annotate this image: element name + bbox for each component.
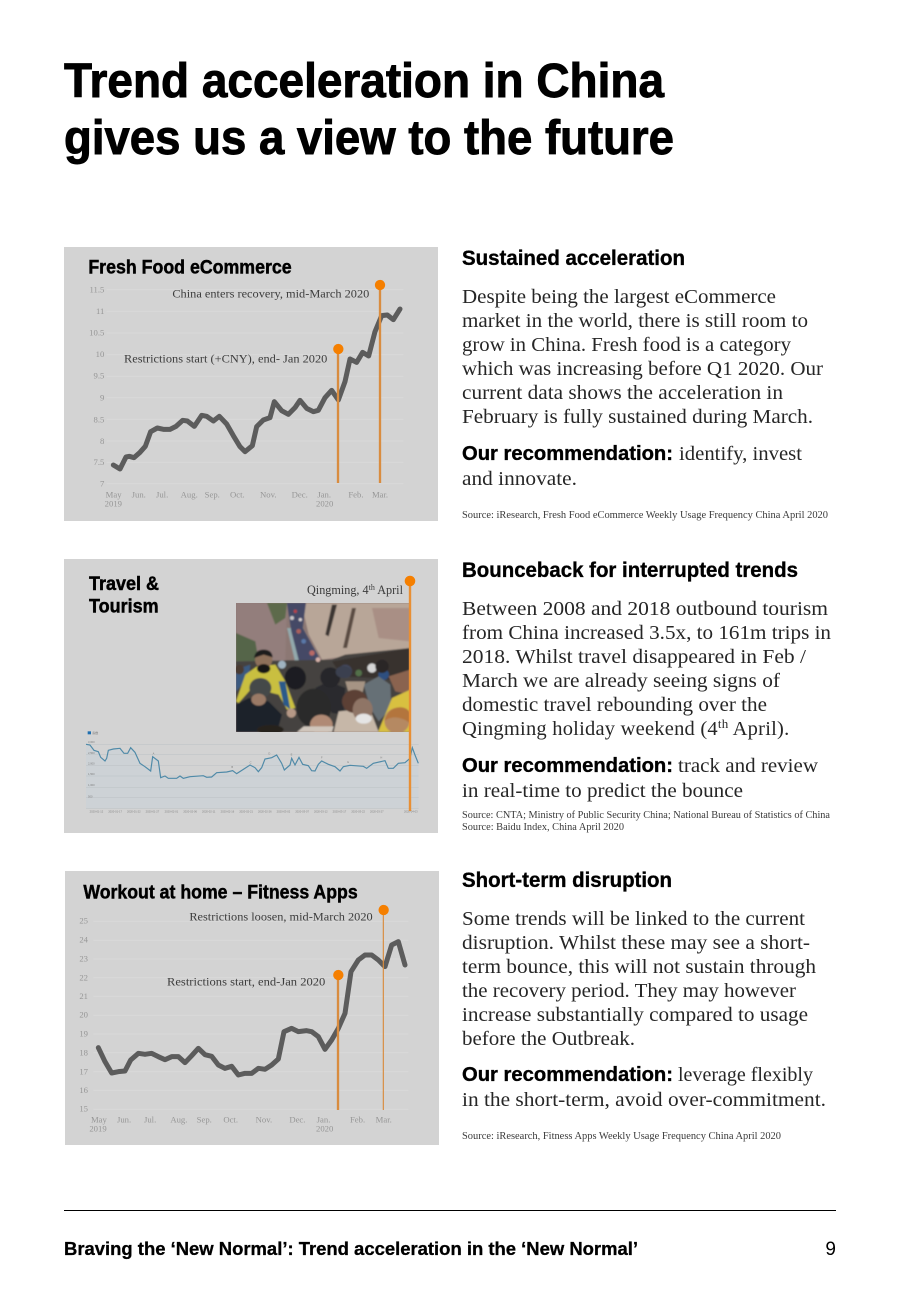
date labels: 2020-03-22: [351, 809, 365, 813]
y axis labels: 25: [79, 916, 88, 926]
legend: [88, 730, 98, 735]
text block: bounceback: th: [718, 716, 729, 731]
source: Source: Baidu Index, China April 2020: [462, 822, 624, 833]
x axis labels: Dec.: [292, 489, 308, 499]
recommendation: identify, invest: [679, 443, 802, 465]
annotation: Qingming: th: [369, 583, 375, 592]
date labels: 2020-01-17: [108, 809, 122, 813]
y axis labels: 7: [100, 479, 105, 489]
peak labels: A: [153, 752, 155, 756]
title: gives us a view to the future: [64, 112, 674, 165]
date labels: 2020-02-01: [165, 809, 179, 813]
source: Source: iResearch, Fitness Apps Weekly Usage Frequency China April 2020: [462, 1131, 781, 1142]
photo: crowd on mountain: [235, 603, 410, 735]
recommendation: Our recommendation:: [462, 443, 673, 465]
date labels: 2020-02-11: [202, 809, 216, 813]
panel: Workout at home chart: [65, 871, 439, 1145]
date labels: 2020-01-22: [127, 809, 141, 813]
panel: Fresh Food eCommerce chart: [64, 247, 438, 521]
y axis labels: 2,000: [88, 762, 95, 766]
x axis labels: Jul.: [144, 1115, 156, 1125]
recommendation: track and review: [678, 755, 818, 777]
peak labels: H: [380, 756, 382, 760]
text block: short-term disruption: before the Outbreak.: [462, 1028, 635, 1050]
source: Source: CNTA; Ministry of Public Security China; National Bureau of Statistics of China: [462, 810, 831, 821]
marker: Qingming: [405, 576, 415, 811]
x axis labels: Mar.: [372, 489, 388, 499]
x axis labels: May: [91, 1115, 108, 1125]
text block: sustained acceleration: grow in China. Fresh food is a category: [462, 334, 792, 356]
peak labels: E: [291, 753, 293, 757]
y axis labels: 1,000: [88, 783, 95, 787]
y axis labels: 15: [79, 1104, 88, 1114]
title: Trend acceleration in China: [64, 55, 664, 108]
annotation: Qingming: Qingming, 4: [307, 583, 369, 597]
y axis labels: 17: [79, 1066, 89, 1076]
text block: short-term disruption: increase substantially compared to usage: [462, 1004, 808, 1026]
y axis labels: 9.5: [94, 371, 104, 381]
text block: bounceback: March we are already seeing signs of: [462, 670, 780, 692]
text block: short-term disruption: the recovery period. They may however: [462, 980, 796, 1002]
date labels: 2020-01-12: [90, 809, 104, 813]
y axis labels: 1,500: [88, 772, 95, 776]
y axis labels: 11.5: [90, 284, 104, 294]
x axis labels: Jan.: [317, 1115, 330, 1125]
recommendation: [462, 755, 818, 802]
panel: Travel and Tourism chart: [64, 559, 438, 833]
x axis labels: 2020: [316, 1124, 333, 1134]
recommendation: in real-time to predict the bounce: [462, 780, 743, 802]
y axis labels: 19: [79, 1029, 88, 1039]
y axis labels: 500: [88, 794, 93, 798]
annotation: restrictions: Restrictions start (+CNY), end- Jan 2020: [124, 353, 328, 366]
chart heading: Travel &: [89, 574, 159, 595]
x axis labels: Oct.: [223, 1115, 238, 1125]
x axis labels: 2020: [316, 499, 333, 509]
y axis labels: 10: [96, 349, 104, 359]
text block: bounceback: domestic travel rebounding over the: [462, 694, 767, 716]
y axis labels: 18: [79, 1047, 88, 1057]
marker: restrictions loosen: [378, 905, 389, 1110]
text block: short-term disruption: [462, 869, 826, 1142]
recommendation: and innovate.: [462, 468, 577, 490]
x axis labels: 2019: [105, 499, 122, 509]
text block: short-term disruption: disruption. Whilst these may see a short-: [462, 932, 810, 954]
recommendation: [462, 1064, 826, 1111]
peak labels: G: [347, 760, 349, 764]
date labels: 2020-01-27: [146, 809, 160, 813]
marker: restrictions start: [333, 344, 343, 483]
peak labels: F: [321, 756, 323, 760]
peak labels: [153, 752, 382, 769]
x axis labels: Jan.: [317, 489, 331, 499]
recommendation: in the short-term, avoid over-commitment.: [462, 1089, 826, 1111]
y axis labels: 16: [79, 1085, 89, 1095]
x axis labels: Feb.: [350, 1115, 365, 1125]
text block: short-term disruption: Short-term disruption: [462, 869, 672, 892]
text block: bounceback: Bounceback for interrupted trends: [462, 559, 798, 582]
x axis labels: Mar.: [376, 1115, 392, 1125]
text block: sustained acceleration: February is fully sustained during March.: [462, 406, 813, 428]
y axis labels: 8: [100, 436, 104, 446]
x axis labels: Sep.: [197, 1115, 212, 1125]
x axis labels: [105, 489, 388, 509]
date labels: 2020-02-16: [221, 809, 235, 813]
footer text: Braving the ‘New Normal’: Trend acceleration in the ‘New Normal’: [64, 1239, 638, 1259]
line series: [113, 309, 400, 469]
x axis labels: Dec.: [289, 1115, 305, 1125]
source: Source: iResearch, Fresh Food eCommerce Weekly Usage Frequency China April 2020: [462, 510, 828, 521]
text block: sustained acceleration: current data shows the acceleration in: [462, 382, 783, 404]
date labels: 2020-03-12: [314, 809, 328, 813]
x axis labels: Jun.: [132, 489, 146, 499]
y axis labels: 8.5: [94, 414, 104, 424]
y axis labels: 22: [79, 972, 88, 982]
x axis labels: Jul.: [156, 489, 168, 499]
y axis labels: 9: [100, 392, 104, 402]
chart heading: [89, 574, 159, 617]
line series: [98, 942, 405, 1075]
x axis labels: Aug.: [181, 489, 198, 499]
text block: sustained acceleration: which was increasing before Q1 2020. Our: [462, 358, 823, 380]
text block: sustained acceleration: [462, 247, 828, 521]
x axis labels: Aug.: [170, 1115, 187, 1125]
date labels: 2020-04-03: [404, 809, 418, 813]
chart heading: Fresh Food eCommerce: [88, 257, 292, 278]
page number: 9: [825, 1239, 836, 1260]
text block: sustained acceleration: Despite being the largest eCommerce: [462, 286, 776, 308]
x axis labels: 2019: [89, 1124, 107, 1134]
annotation: loosen: Restrictions loosen, mid-March 2020: [189, 911, 373, 924]
x axis labels: Sep.: [205, 489, 220, 499]
y axis labels: 20: [79, 1010, 88, 1020]
text block: bounceback: 2018. Whilst travel disappeared in Feb /: [462, 646, 806, 668]
recommendation: Our recommendation:: [462, 1064, 673, 1086]
date labels: [90, 809, 418, 813]
date labels: 2020-03-17: [333, 809, 347, 813]
date labels: 2020-03-27: [370, 809, 384, 813]
date labels: 2020-03-02: [277, 809, 291, 813]
x axis labels: May: [106, 489, 122, 499]
y axis labels: 23: [79, 954, 88, 964]
line chart: Baidu index: [86, 730, 419, 813]
y axis labels: 10.5: [89, 327, 104, 337]
x axis labels: Jun.: [117, 1115, 131, 1125]
y axis labels: 21: [79, 991, 88, 1001]
text block: bounceback: Between 2008 and 2018 outbound tourism: [462, 598, 828, 620]
peak labels: B: [231, 765, 233, 769]
annotation: start: Restrictions start, end-Jan 2020: [167, 976, 326, 989]
peak labels: C: [250, 760, 252, 764]
y axis labels: 11: [96, 306, 104, 316]
y axis labels: 7.5: [94, 457, 104, 467]
x axis labels: Nov.: [260, 489, 277, 499]
annotation: Qingming: April: [375, 583, 404, 597]
text block: bounceback: from China increased 3.5x, to 161m trips in: [462, 622, 831, 644]
marker: recovery: [375, 280, 385, 483]
y axis labels: 3,000: [88, 740, 95, 744]
source: [462, 810, 831, 833]
recommendation: Our recommendation:: [462, 755, 673, 777]
date labels: 2020-03-07: [295, 809, 309, 813]
text block: bounceback: [462, 559, 831, 833]
date labels: 2020-02-06: [183, 809, 197, 813]
recommendation: [462, 443, 802, 490]
text block: sustained acceleration: Sustained acceleration: [462, 247, 685, 270]
x axis labels: [89, 1115, 392, 1134]
peak labels: D: [268, 752, 270, 756]
y axis labels: 24: [79, 935, 89, 945]
marker: restrictions start: [333, 970, 343, 1110]
text block: short-term disruption: term bounce, this will not sustain through: [462, 956, 816, 978]
date labels: 2020-02-26: [258, 809, 272, 813]
legend: 指数: [92, 730, 98, 735]
chart heading: Tourism: [89, 596, 159, 617]
x axis labels: Feb.: [348, 489, 363, 499]
x axis labels: Oct.: [230, 489, 245, 499]
text block: bounceback: Qingming holiday weekend (4: [462, 718, 718, 740]
chart heading: Workout at home – Fitness Apps: [83, 882, 358, 903]
date labels: 2020-02-21: [239, 809, 253, 813]
annotation: recovery: China enters recovery, mid-March 2020: [172, 288, 370, 301]
y axis labels: 2,500: [88, 751, 95, 755]
recommendation: leverage flexibly: [678, 1064, 814, 1086]
x axis labels: Nov.: [256, 1115, 272, 1125]
text block: bounceback: April).: [728, 718, 789, 740]
y axis labels: [89, 284, 105, 489]
text block: sustained acceleration: market in the world, there is still room to: [462, 310, 808, 332]
title: [64, 55, 674, 165]
text block: short-term disruption: Some trends will be linked to the current: [462, 908, 805, 930]
y axis labels: [79, 916, 89, 1114]
y axis labels: [88, 740, 95, 798]
